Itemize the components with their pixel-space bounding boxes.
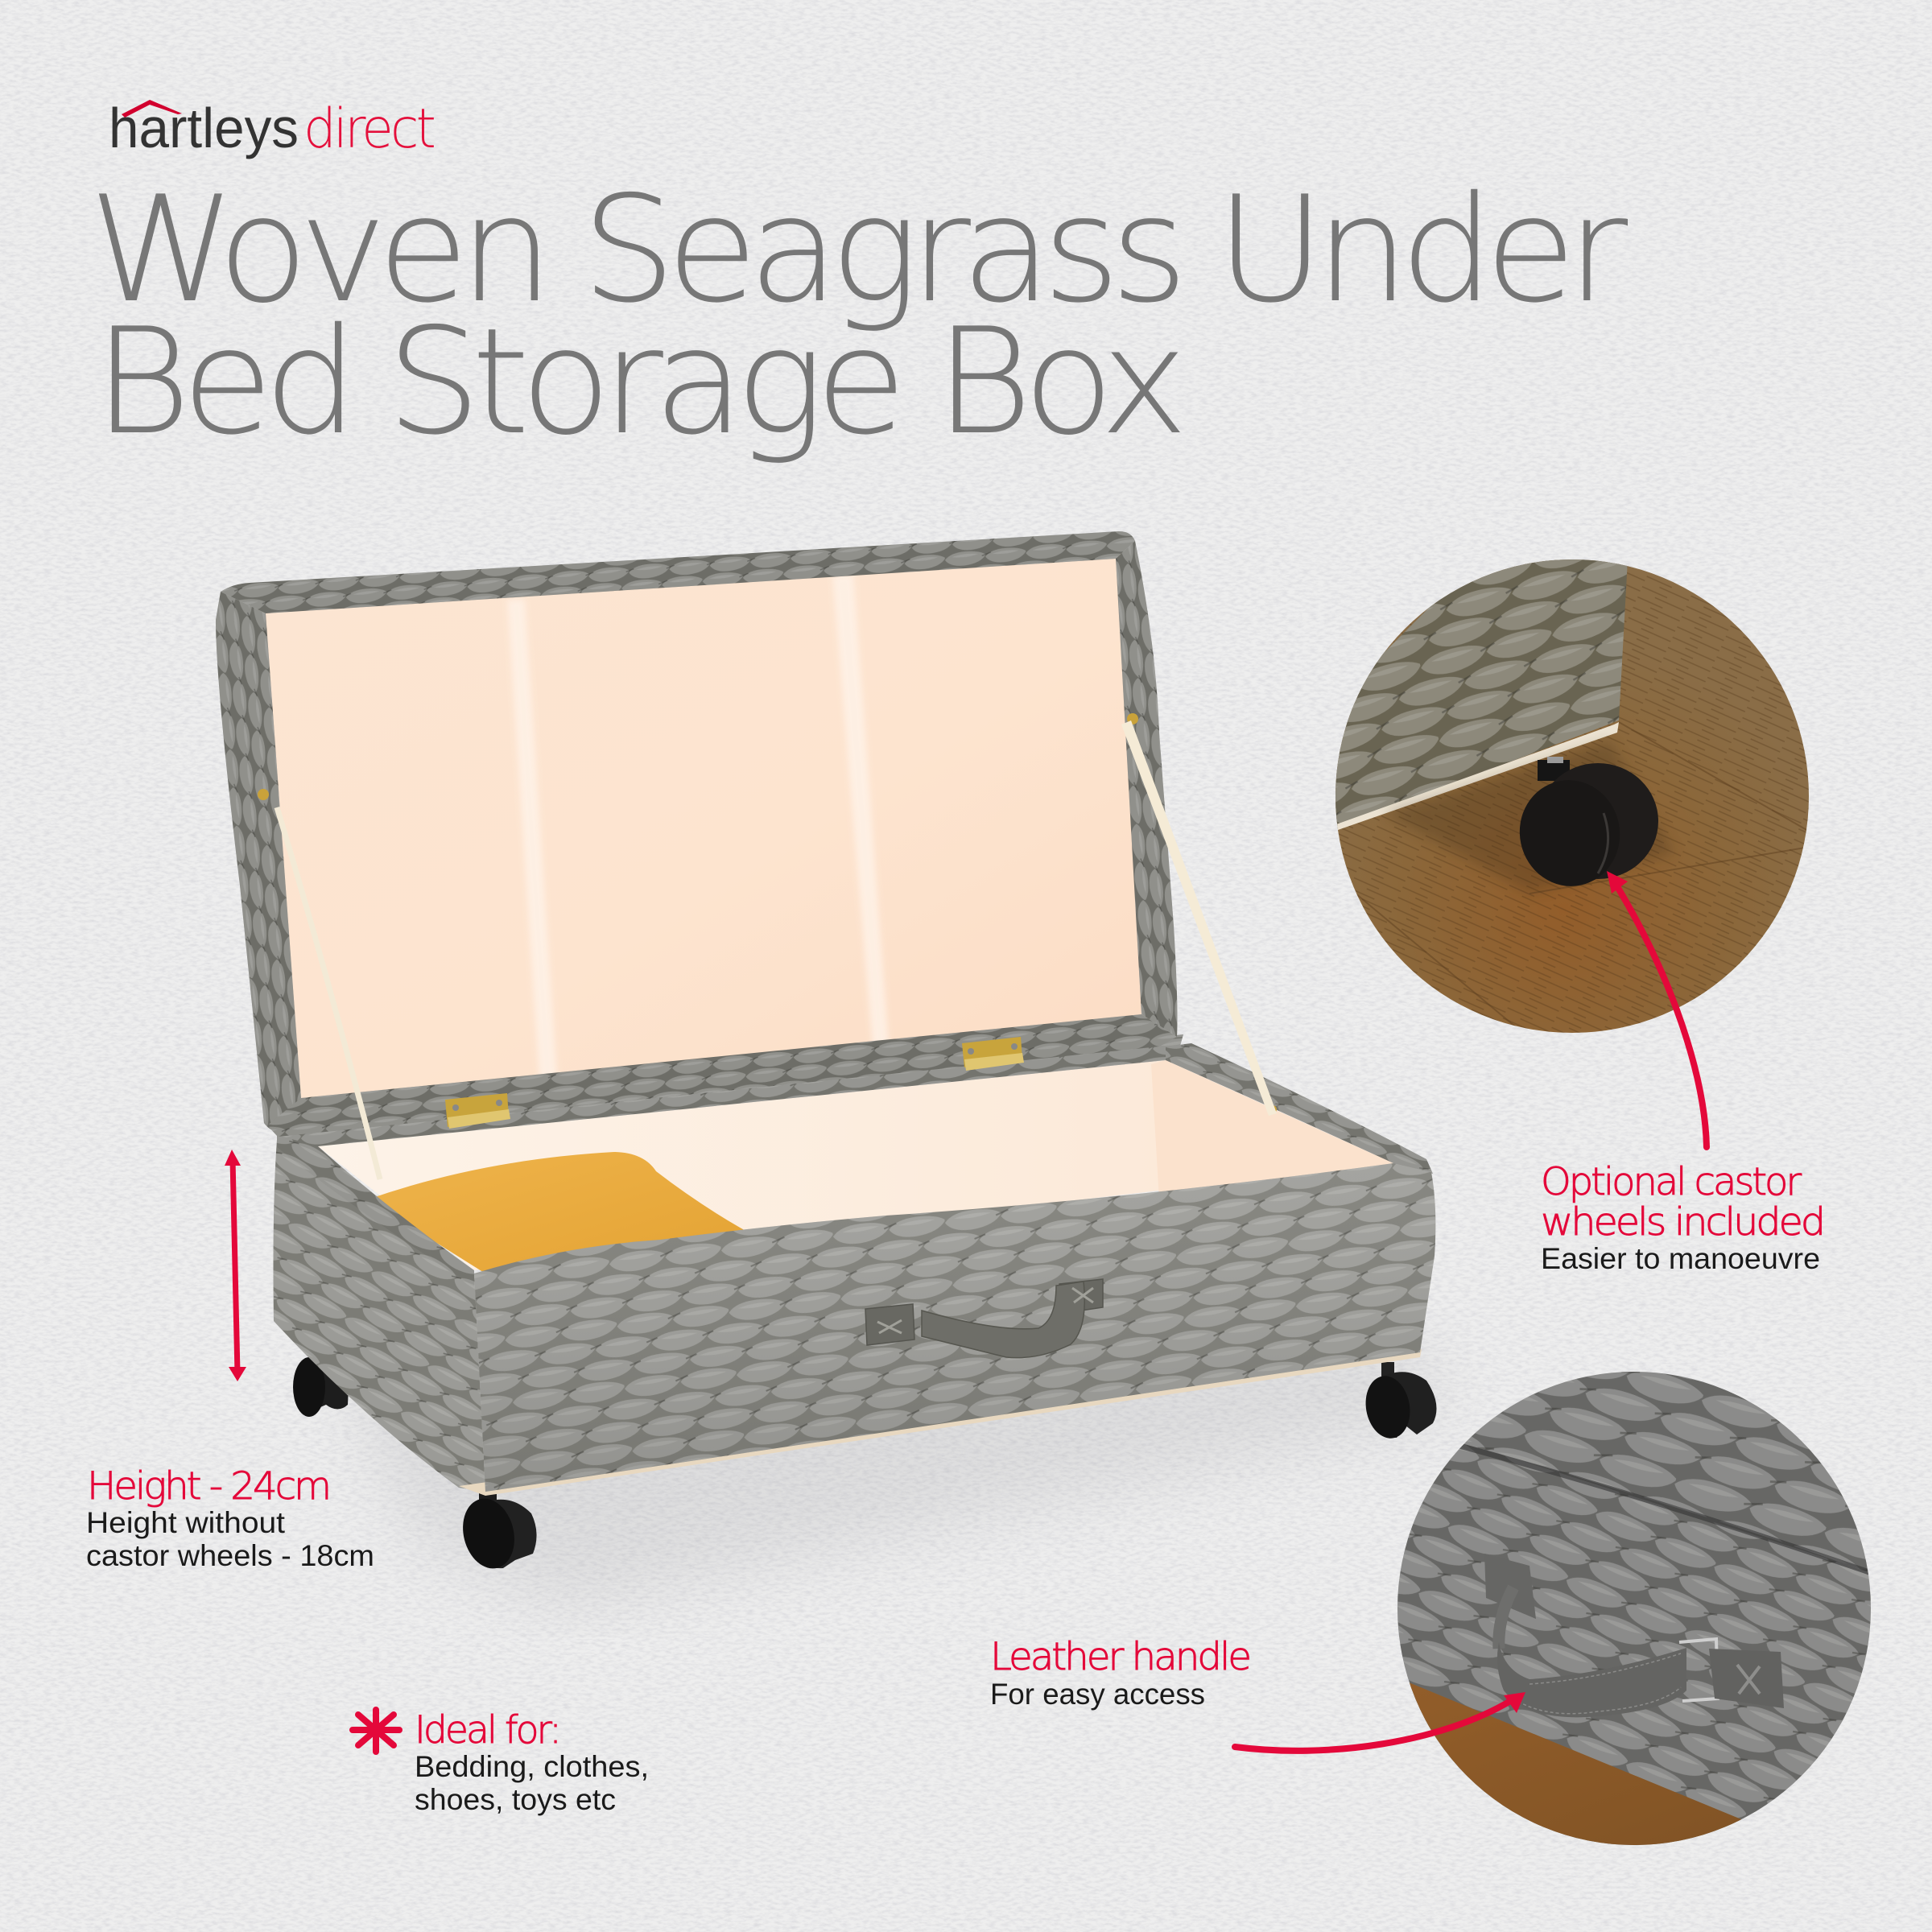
handle plate left — [865, 1304, 914, 1345]
right handle plate — [1709, 1649, 1784, 1708]
yellow blanket — [368, 1152, 765, 1274]
box left rim — [277, 1135, 474, 1286]
callout: ideal for: shoes, toys etc — [415, 1783, 616, 1816]
logo: hartleys direct — [109, 97, 434, 161]
icon: red asterisk — [353, 1710, 399, 1752]
castor wheel: front — [456, 1489, 537, 1574]
box left side — [274, 1140, 485, 1492]
castor — [1520, 757, 1658, 886]
arrow: handle callout — [1235, 1692, 1525, 1751]
wood floor — [1409, 1682, 1742, 1845]
interior back wall — [318, 1060, 1393, 1270]
callout text: leather handle: For easy access — [990, 1678, 1205, 1711]
title — [89, 164, 1628, 467]
box front face — [474, 1163, 1435, 1492]
interior right wall — [1151, 1060, 1393, 1199]
lid seam shadow — [1459, 1446, 1869, 1572]
lid rim bottom — [267, 1014, 1177, 1137]
icon: logo roof — [122, 100, 182, 118]
lid rim top — [221, 531, 1135, 613]
callout text: leather handle: Leather handle — [990, 1635, 1249, 1679]
lid lining — [258, 547, 1151, 1115]
callout: ideal for: Bedding, clothes, — [415, 1750, 649, 1783]
dimension arrow: height — [225, 1150, 246, 1381]
callout text: leather handle — [990, 1635, 1249, 1711]
lid rim left — [216, 592, 301, 1131]
product: wicker storage box with open lid — [216, 531, 1436, 1574]
floor shadow under box — [338, 1336, 1449, 1610]
wicker lid overhang — [1449, 1368, 1876, 1574]
callout text: height: Height - 24cm — [87, 1464, 329, 1509]
detail circle: leather handle — [1393, 1368, 1876, 1860]
box interior — [318, 1060, 1393, 1274]
ribbon stay right — [1121, 720, 1277, 1116]
castor wheel: right — [1361, 1362, 1436, 1442]
callout text: castor wheels: wheels included — [1541, 1200, 1823, 1245]
callout text: height: castor wheels - 18cm — [86, 1539, 374, 1572]
wicker corner — [1328, 555, 1628, 829]
handle plate right — [1059, 1279, 1103, 1314]
callout text: height: Height without — [86, 1506, 286, 1539]
hinge right — [962, 1037, 1024, 1071]
wicker backing — [1393, 1368, 1876, 1852]
title: Bed Storage Box — [93, 296, 1180, 467]
callout: ideal for: Ideal for: — [415, 1708, 559, 1752]
floor shadow — [1385, 741, 1674, 894]
leather handle strap — [922, 1282, 1084, 1358]
callout text: castor wheels — [1541, 1160, 1823, 1275]
brass rivets — [258, 713, 1277, 1113]
callout: ideal for — [353, 1708, 649, 1816]
lid — [216, 531, 1277, 1179]
box right rim — [1166, 1043, 1433, 1174]
title: Woven Seagrass Under — [89, 164, 1628, 335]
callout text: castor wheels: Optional castor — [1541, 1160, 1802, 1204]
left handle plate — [1484, 1554, 1536, 1619]
logo: hartleys direct: hartleys — [109, 97, 299, 159]
ring — [1679, 1639, 1718, 1701]
logo: hartleys direct: direct — [303, 97, 434, 161]
box base cream strip — [459, 1349, 1422, 1496]
wicker front — [1393, 1441, 1876, 1821]
wood floor — [1328, 555, 1819, 1046]
callout text: castor wheels: Easier to manoeuvre — [1541, 1242, 1820, 1275]
handle — [1484, 1554, 1784, 1717]
thin upper strap — [1499, 1587, 1513, 1649]
lining fold bands — [507, 574, 889, 1080]
castor wheel: back left — [293, 1357, 349, 1417]
leather strap — [1497, 1642, 1686, 1717]
callout text: height — [86, 1464, 374, 1572]
lid rim right — [1116, 541, 1177, 1037]
hinge left — [445, 1093, 510, 1129]
ribbon stay left — [277, 807, 380, 1179]
box back rim — [274, 1034, 1183, 1159]
detail circle: castor wheel — [1328, 555, 1819, 1046]
arrow: castor callout — [1607, 871, 1707, 1147]
cream base strip — [1336, 722, 1619, 830]
